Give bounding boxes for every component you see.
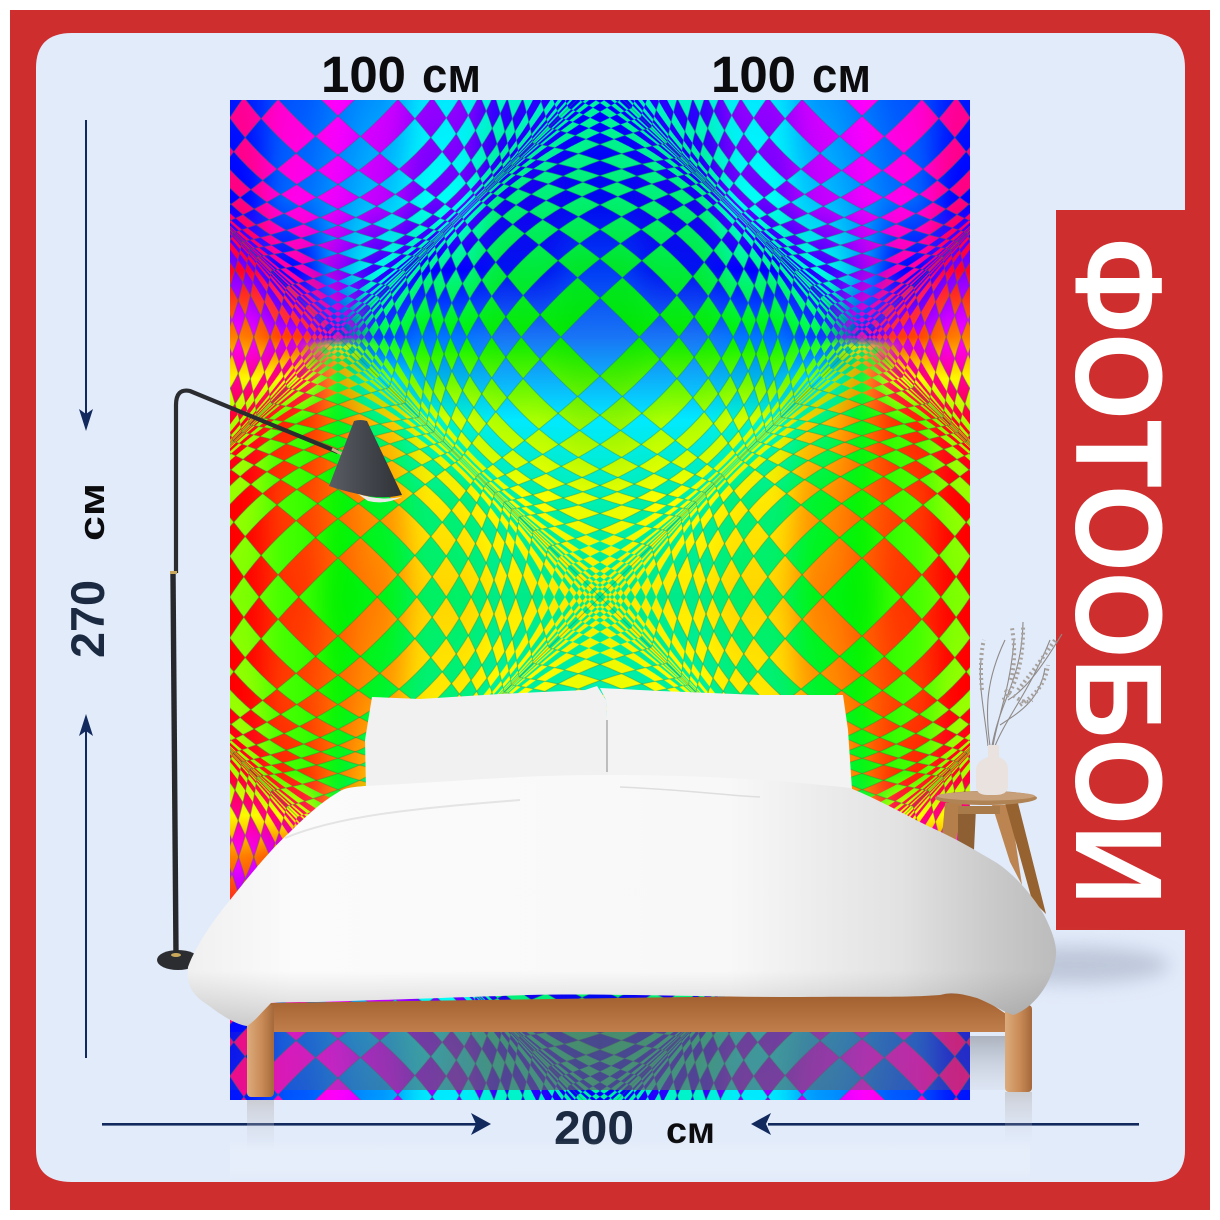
bed frame (247, 993, 1032, 1097)
arrow: width right (102, 1113, 491, 1135)
dimension: height 270 cm: 270 (61, 580, 114, 658)
wallpaper reflection tint behind bed (230, 1032, 970, 1090)
leg reflections (247, 1092, 1032, 1150)
banner: ФОТООБОИ: ФОТООБОИ (1049, 238, 1186, 905)
arrow: height down (79, 120, 93, 431)
dimension: top left 100 cm: см (422, 49, 481, 103)
arrow: width left (751, 1113, 1139, 1135)
vase with dry branches (976, 622, 1062, 795)
dimension: top left 100 cm: 100 (321, 46, 406, 103)
dimension: width 200 cm (554, 1101, 715, 1154)
side table (935, 791, 1046, 914)
duvet (188, 775, 1056, 1026)
dimension: top right 100 cm (711, 46, 871, 103)
dimension: width 200 cm: см (666, 1110, 715, 1151)
dimension: top right 100 cm: см (812, 49, 871, 103)
wallpaper: rainbow op-art checker (190, 100, 1010, 1100)
floor lamp (157, 391, 402, 970)
dimension: height 270 cm: см (71, 483, 112, 541)
dimension: top left 100 cm (321, 46, 481, 103)
pillows (365, 686, 852, 790)
arrow: height up (79, 714, 93, 1058)
dimension: top right 100 cm: 100 (711, 46, 796, 103)
wall and floor shadows of bed (230, 946, 1170, 1180)
dimension: width 200 cm: 200 (554, 1101, 634, 1154)
dimension: height 270 cm (61, 483, 114, 658)
banner: ФОТООБОИ (1049, 210, 1210, 1180)
